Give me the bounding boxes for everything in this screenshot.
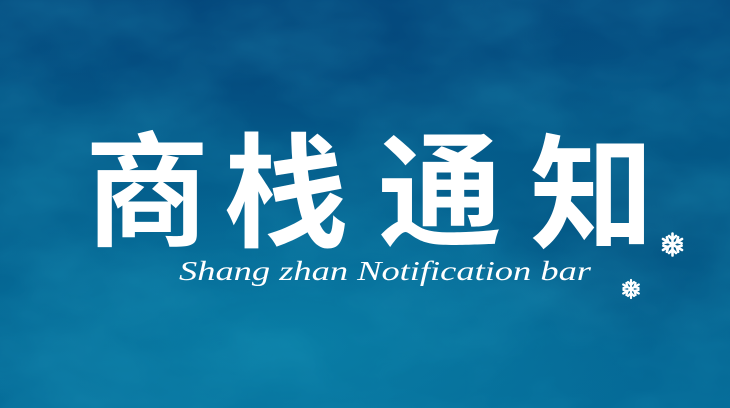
title: 商 — [85, 125, 209, 263]
title: 栈 — [224, 126, 348, 264]
icon: small snowflake — [622, 280, 640, 298]
icon: large snowflake — [661, 234, 684, 256]
title — [85, 125, 654, 265]
title: 通 — [378, 125, 502, 263]
title: 知 — [530, 127, 654, 265]
subtitle: Shang zhan Notification bar — [179, 256, 592, 286]
